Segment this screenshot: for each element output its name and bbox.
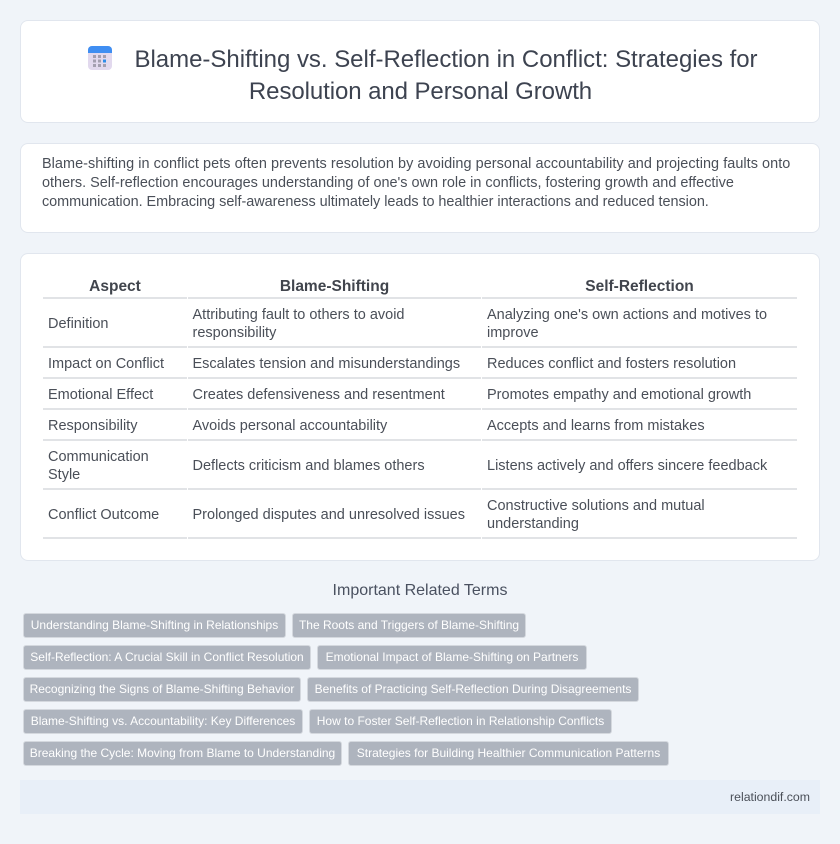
chip bbox=[309, 709, 612, 734]
chip bbox=[23, 645, 311, 670]
panel: comparison table: Deflects criticism and blames others bbox=[192, 458, 425, 474]
panel: comparison table: Promotes empathy and emotional growth bbox=[487, 387, 751, 403]
footer text: relationdif.com bbox=[730, 790, 810, 804]
chip bbox=[317, 645, 587, 670]
intro paragraph bbox=[42, 156, 790, 210]
intro paragraph: others. Self-reflection encourages understanding of one's own role in conflicts, fostering growth and effective bbox=[42, 175, 734, 191]
panel: comparison table: Impact on Conflict bbox=[48, 356, 164, 372]
chip: Recognizing the Signs of Blame-Shifting Behavior bbox=[30, 682, 294, 696]
title bbox=[134, 46, 758, 105]
panel: comparison table: Style bbox=[48, 467, 80, 483]
panel: comparison table bbox=[20, 253, 820, 561]
chip: Emotional Impact of Blame-Shifting on Partners bbox=[326, 650, 578, 664]
heading: Important Related Terms: Important Related Terms bbox=[333, 582, 507, 599]
chip bbox=[307, 677, 639, 702]
chip bbox=[292, 613, 526, 638]
table header: Aspect: Aspect bbox=[89, 278, 141, 295]
panel: comparison table: Emotional Effect bbox=[48, 387, 153, 403]
panel: comparison table: Conflict Outcome bbox=[48, 507, 159, 523]
title: Blame-Shifting vs. Self-Reflection in Conflict: Strategies for bbox=[134, 46, 758, 73]
row: Impact on Conflict bbox=[48, 356, 736, 372]
panel: comparison table: Avoids personal accountability bbox=[192, 418, 387, 434]
table header: Blame-Shifting: Blame-Shifting bbox=[280, 278, 389, 295]
chip: How to Foster Self-Reflection in Relationship Conflicts bbox=[317, 714, 604, 728]
chip: Blame-Shifting vs. Accountability: Key Differences bbox=[31, 714, 295, 728]
panel: comparison table: Creates defensiveness and resentment bbox=[192, 387, 445, 403]
chip: Strategies for Building Healthier Communication Patterns bbox=[357, 746, 660, 760]
panel: comparison table: Responsibility bbox=[48, 418, 137, 434]
panel: comparison table: Communication bbox=[48, 449, 149, 465]
table header: Self-Reflection: Self-Reflection bbox=[585, 278, 694, 295]
footer bar bbox=[20, 780, 820, 814]
chip: Self-Reflection: A Crucial Skill in Conflict Resolution bbox=[30, 650, 304, 664]
chip bbox=[23, 709, 303, 734]
chip: Understanding Blame-Shifting in Relationships bbox=[31, 618, 278, 632]
intro paragraph: Blame-shifting in conflict pets often prevents resolution by avoiding personal accountability and projecting faults onto bbox=[42, 156, 790, 172]
header card bbox=[20, 20, 820, 123]
title: Resolution and Personal Growth bbox=[249, 78, 592, 105]
panel: comparison table: Definition bbox=[48, 316, 108, 332]
row: Responsibility bbox=[48, 418, 705, 434]
panel: comparison table: Reduces conflict and fosters resolution bbox=[487, 356, 736, 372]
chip bbox=[23, 677, 301, 702]
panel: comparison table: Prolonged disputes and unresolved issues bbox=[192, 507, 465, 523]
panel: comparison table: improve bbox=[487, 325, 539, 341]
chip bbox=[348, 741, 669, 766]
panel: comparison table: responsibility bbox=[192, 325, 276, 341]
icon: calendar bbox=[88, 46, 112, 70]
chip: Benefits of Practicing Self-Reflection During Disagreements bbox=[315, 682, 631, 696]
intro paragraph: communication. Embracing self-awareness ultimately leads to healthier interactions and reduced tension. bbox=[42, 194, 709, 210]
panel: comparison table: understanding bbox=[487, 516, 579, 532]
chip: The Roots and Triggers of Blame-Shifting bbox=[299, 618, 519, 632]
panel: comparison table: Analyzing one's own actions and motives to bbox=[487, 307, 767, 323]
panel: comparison table: Constructive solutions and mutual bbox=[487, 498, 705, 514]
row: Definition bbox=[48, 307, 767, 341]
chip bbox=[23, 613, 286, 638]
chip bbox=[23, 741, 342, 766]
row: Conflict Outcome bbox=[48, 498, 705, 532]
chip: Breaking the Cycle: Moving from Blame to Understanding bbox=[30, 746, 335, 760]
row: Emotional Effect bbox=[48, 387, 751, 403]
panel: comparison table: Attributing fault to others to avoid bbox=[192, 307, 404, 323]
panel: comparison table: Listens actively and offers sincere feedback bbox=[487, 458, 767, 474]
row: Communication Style bbox=[48, 449, 768, 483]
panel: intro text bbox=[20, 143, 820, 233]
panel: comparison table: Escalates tension and misunderstandings bbox=[192, 356, 460, 372]
panel: comparison table: Accepts and learns from mistakes bbox=[487, 418, 705, 434]
